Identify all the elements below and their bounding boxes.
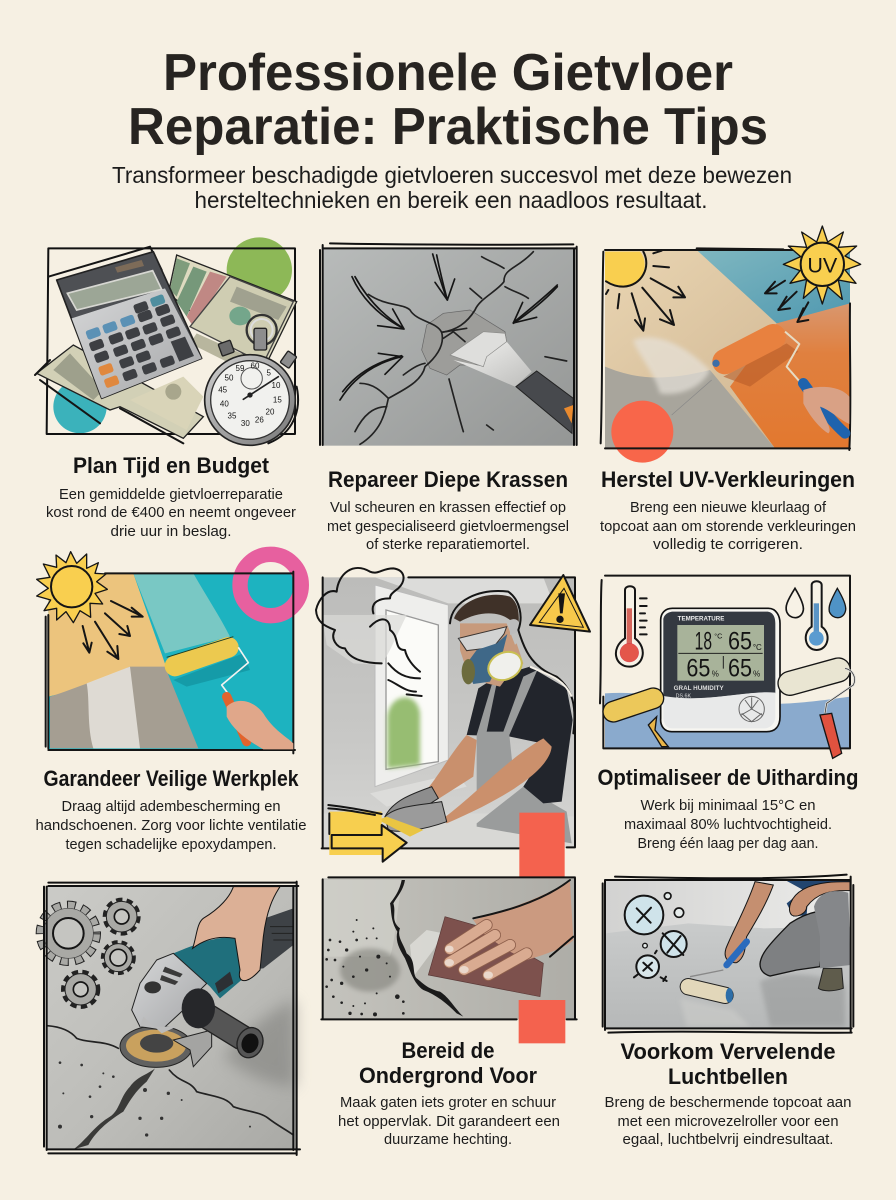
illustration: hygrometer, thermometers and rollers: % <box>712 670 719 679</box>
heading <box>359 1038 537 1088</box>
panel: worker with respirator <box>316 568 590 877</box>
panel: angle grinder on concrete <box>40 882 300 1155</box>
panel: plan tijd en budget <box>35 237 298 540</box>
illustration: hygrometer, thermometers and rollers: 65 <box>728 655 752 683</box>
title: Reparatie: Praktische Tips <box>128 98 768 156</box>
illustration: calculator, money and stopwatch: 20 <box>266 408 275 417</box>
body text <box>604 1095 852 1148</box>
illustration: calculator, money and stopwatch: 40 <box>220 400 229 409</box>
heading: Ondergrond Voor <box>359 1063 537 1088</box>
body text: met een microvezelroller voor een <box>618 1114 838 1130</box>
illustration: hygrometer, thermometers and rollers: °C <box>714 631 723 640</box>
title: Professionele Gietvloer <box>163 44 733 102</box>
body text: topcoat aan om storende verkleuringen <box>600 519 856 535</box>
illustration: hygrometer, thermometers and rollers: 65 <box>686 655 710 683</box>
body text: volledig te corrigeren. <box>653 537 803 553</box>
illustration: hygrometer, thermometers and rollers: DS.6K <box>676 693 691 699</box>
illustration: calculator, money and stopwatch: 50 <box>225 374 234 383</box>
heading: Repareer Diepe Krassen <box>328 467 568 492</box>
body text: Werk bij minimaal 15°C en <box>640 798 816 814</box>
body text: egaal, luchtbelvrij eindresultaat. <box>622 1132 834 1148</box>
panel: repareer diepe krassen <box>320 243 577 553</box>
body text: Breng één laag per dag aan. <box>638 836 818 852</box>
illustration: calculator, money and stopwatch: 60 <box>251 361 260 370</box>
illustration: calculator, money and stopwatch: 59 <box>236 364 245 373</box>
illustration: ventilated workplace and protective gear <box>316 568 590 877</box>
apron lower <box>477 787 572 843</box>
illustration: calculator, money and stopwatch <box>35 237 298 445</box>
body text <box>36 799 306 853</box>
body text <box>327 500 569 553</box>
icon: gears <box>40 901 138 1006</box>
illustration: calculator, money and stopwatch: 45 <box>218 386 228 395</box>
body text <box>600 500 856 553</box>
body text: het oppervlak. Dit garandeert een <box>338 1114 560 1130</box>
body text: Maak gaten iets groter en schuur <box>340 1095 556 1111</box>
body text: Draag altijd adembescherming en <box>62 799 280 815</box>
illustration: calculator, money and stopwatch: 26 <box>255 416 264 425</box>
illustration: calculator, money and stopwatch: 30 <box>241 419 250 428</box>
illustration: hygrometer, thermometers and rollers: % <box>753 670 760 679</box>
body text: drie uur in beslag. <box>110 524 232 540</box>
subtitle <box>112 162 792 213</box>
heading: Herstel UV-Verkleuringen <box>601 467 855 492</box>
illustration: hygrometer, thermometers and rollers <box>600 576 855 758</box>
illustration: hygrometer, thermometers and rollers: 65 <box>728 627 752 655</box>
heading: Bereid de <box>402 1038 494 1063</box>
title <box>128 44 768 156</box>
heading: Luchtbellen <box>668 1064 788 1089</box>
illustration: floor being rolled under the sun <box>37 552 301 753</box>
shirt <box>467 667 573 803</box>
illustration: cracked concrete and filling knife <box>320 243 577 446</box>
panel: herstel uv-verkleuringen <box>600 226 861 553</box>
illustration: uv damaged floor and roller <box>601 226 861 463</box>
heading <box>620 1039 836 1089</box>
illustration: hygrometer, thermometers and rollers: °C <box>753 643 762 652</box>
illustration: calculator, money and stopwatch: 10 <box>272 381 281 390</box>
body text: maximaal 80% luchtvochtigheid. <box>624 817 832 833</box>
illustration: hygrometer, thermometers and rollers: GRAL HUMIDITY <box>674 686 724 692</box>
icon: angle grinder <box>120 908 293 1067</box>
heading: Voorkom Vervelende <box>620 1039 836 1064</box>
icon: hand <box>193 887 280 981</box>
body text: handschoenen. Zorg voor lichte ventilatie <box>36 818 306 834</box>
illustration: calculator, money and stopwatch: 5 <box>266 368 271 377</box>
body text: Breng een nieuwe kleurlaag of <box>630 500 827 516</box>
illustration: sanding the cracked surface <box>321 877 577 1043</box>
subtitle: Transformeer beschadigde gietvloeren succesvol met deze bewezen <box>112 162 792 188</box>
subtitle: hersteltechnieken en bereik een naadloos resultaat. <box>194 187 708 213</box>
body text: duurzame hechting. <box>384 1132 512 1148</box>
illustration: rolling topcoat with bubble icons <box>603 875 853 1033</box>
body text <box>46 487 296 540</box>
panel: optimaliseer de uitharding <box>598 576 858 852</box>
body text <box>624 798 832 852</box>
panel: bereid de ondergrond voor <box>321 877 577 1148</box>
panel: voorkom vervelende luchtbellen <box>603 875 853 1148</box>
heading: Garandeer Veilige Werkplek <box>44 766 299 791</box>
body text: Een gemiddelde gietvloerreparatie <box>59 487 283 503</box>
body text: of sterke reparatiemortel. <box>366 537 530 553</box>
illustration: calculator, money and stopwatch: 15 <box>273 396 282 405</box>
illustration: uv damaged floor and roller: UV <box>807 253 838 277</box>
body text <box>338 1095 560 1148</box>
body text: tegen schadelijke epoxydampen. <box>66 837 276 853</box>
icon: air bubbles <box>625 893 687 981</box>
illustration: grinder, gears and cracks <box>40 882 300 1155</box>
apron bib <box>477 670 537 793</box>
illustration: calculator, money and stopwatch: 35 <box>228 412 237 421</box>
body text: Vul scheuren en krassen effectief op <box>330 500 566 516</box>
body text: met gespecialiseerd gietvloermengsel <box>327 519 569 535</box>
heading: Optimaliseer de Uitharding <box>598 765 858 790</box>
panel: garandeer veilige werkplek <box>36 552 306 853</box>
body text: kost rond de €400 en neemt ongeveer <box>46 505 296 521</box>
heading: Plan Tijd en Budget <box>73 453 270 478</box>
body text: Breng de beschermende topcoat aan <box>604 1095 852 1111</box>
illustration: hygrometer, thermometers and rollers: 18 <box>695 627 712 655</box>
illustration: hygrometer, thermometers and rollers: TEMPERATURE <box>678 617 724 623</box>
